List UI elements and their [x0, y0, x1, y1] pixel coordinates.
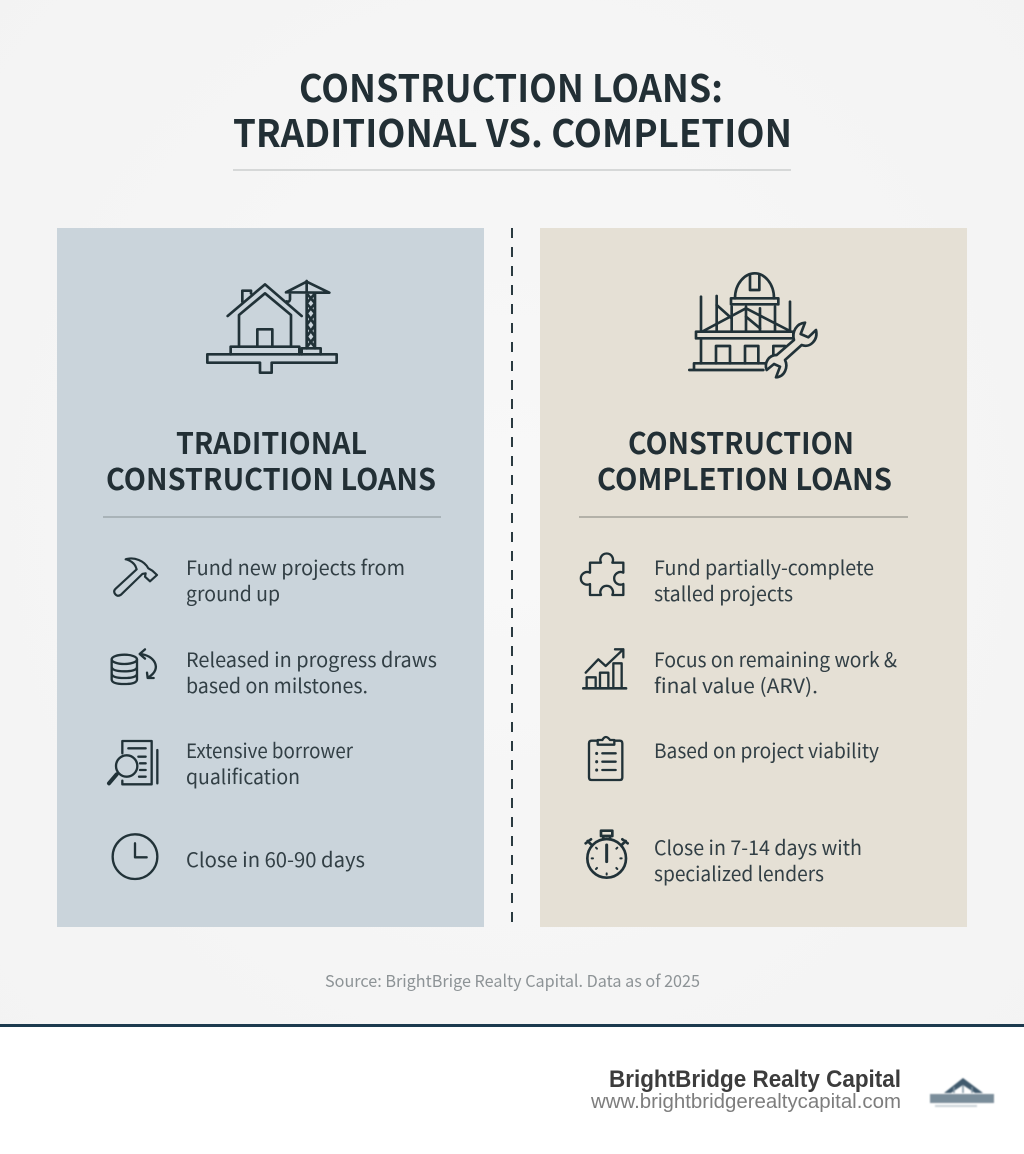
- logo: [930, 1078, 994, 1107]
- heading: traditional construction loans: TRADITIONAL: [176, 419, 367, 463]
- icon: scaffold, helmet and wrench: [689, 273, 816, 377]
- icon: puzzle piece: [581, 554, 623, 595]
- text: fund new projects: [186, 552, 405, 607]
- text: partially-complete projects: stalled projects: [654, 578, 793, 607]
- text: project viability: Based on project viability: [654, 735, 880, 764]
- text: fund new projects: ground up: [186, 578, 280, 607]
- heading: construction completion loans: CONSTRUCTION: [628, 419, 854, 463]
- title: [233, 58, 792, 158]
- text: borrower qualification: qualification: [186, 761, 300, 790]
- text: borrower qualification: [186, 735, 353, 790]
- icon: clock: [113, 834, 157, 879]
- heading: traditional construction loans: [106, 419, 436, 499]
- text: partially-complete projects: [654, 552, 874, 607]
- text: remaining work: final value (ARV).: [654, 670, 818, 699]
- heading: construction completion loans: COMPLETION LOANS: [597, 455, 892, 499]
- text: fund new projects: Fund new projects from: [186, 552, 405, 581]
- text: progress draws: Released in progress draws: [186, 644, 437, 673]
- icon: document with magnifier: [109, 741, 157, 784]
- panel: construction completion loans: [540, 228, 967, 927]
- icon: clipboard: [589, 737, 622, 780]
- panel: traditional construction loans: [57, 228, 484, 927]
- title: CONSTRUCTION LOANS:: [299, 58, 723, 113]
- heading: construction completion loans: [597, 419, 892, 499]
- divider: dashed line: [511, 228, 513, 924]
- icon: hammer: [114, 559, 157, 596]
- text: partially-complete projects: Fund partially-complete: [654, 552, 874, 581]
- text: remaining work: Focus on remaining work &: [654, 644, 897, 673]
- icon: stopwatch: [586, 831, 628, 878]
- footer website: www.brightbridgerealtycapital.com: [590, 1091, 901, 1113]
- text: progress draws: based on milstones.: [186, 670, 368, 699]
- source note: Source: BrightBrige Realty Capital. Data as of 2025: [325, 968, 700, 992]
- text: close in 7-14 days: Close in 7-14 days with: [654, 832, 862, 861]
- text: close in 60-90 days: Close in 60-90 days: [186, 844, 365, 873]
- footer band: [0, 1024, 1024, 1154]
- text: close in 7-14 days: [654, 832, 862, 887]
- icon: database with cycle arrows: [112, 649, 156, 684]
- footer brand name: BrightBridge Realty Capital: [609, 1066, 901, 1093]
- text: borrower qualification: Extensive borrower: [186, 735, 353, 764]
- text: close in 7-14 days: specialized lenders: [654, 858, 824, 887]
- icon: growth chart: [583, 649, 626, 688]
- icon: house and crane: [207, 281, 337, 373]
- text: remaining work: [654, 644, 897, 699]
- text: progress draws: [186, 644, 437, 699]
- title: TRADITIONAL VS. COMPLETION: [233, 103, 792, 158]
- heading: traditional construction loans: CONSTRUCTION LOANS: [106, 455, 436, 499]
